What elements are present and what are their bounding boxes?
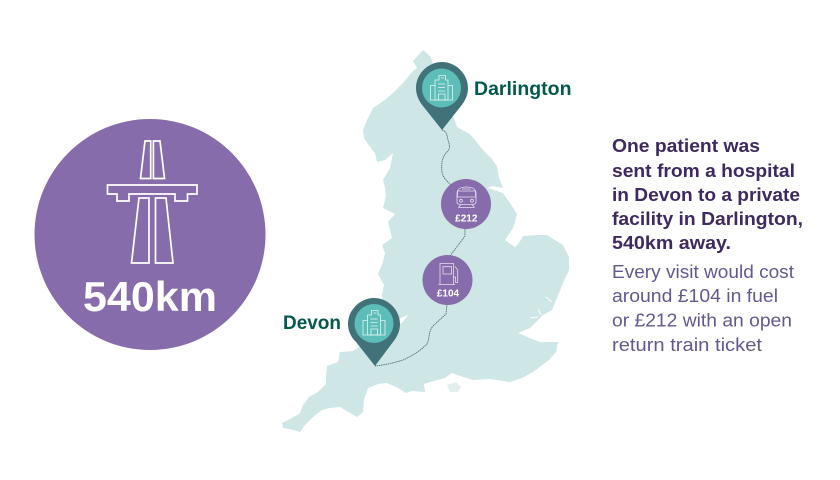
distance figure: 540km bbox=[83, 273, 217, 320]
text block: headline: facility in Darlington, bbox=[612, 209, 803, 229]
icon: train bbox=[457, 187, 476, 208]
text block: costs: around £104 in fuel bbox=[612, 286, 778, 306]
fuel price: £104 bbox=[437, 288, 460, 300]
icon: hospital bbox=[363, 310, 385, 335]
label: Darlington: Darlington bbox=[474, 79, 572, 100]
text block: costs bbox=[612, 262, 794, 355]
text block: headline: 540km away. bbox=[612, 233, 731, 253]
label: Devon: Devon bbox=[283, 313, 341, 334]
pin: Devon bbox=[348, 298, 400, 366]
big purple circle: distance bbox=[34, 119, 266, 350]
text block: headline: sent from a hospital bbox=[612, 161, 795, 181]
icon: motorway bbox=[108, 141, 197, 263]
icon: hospital bbox=[430, 76, 452, 100]
text block: headline: One patient was bbox=[612, 136, 760, 156]
text block: costs: Every visit would cost bbox=[612, 262, 794, 282]
train cost badge bbox=[441, 179, 491, 229]
text block: headline bbox=[612, 136, 803, 253]
text block: costs: return train ticket bbox=[612, 335, 762, 355]
pin: Darlington bbox=[416, 62, 468, 130]
train price: £212 bbox=[455, 214, 478, 224]
map of England and Wales bbox=[282, 50, 569, 432]
icon: fuel pump bbox=[438, 264, 458, 284]
route line Darlington to Devon bbox=[375, 130, 465, 366]
text block: headline: in Devon to a private bbox=[612, 185, 800, 205]
text block: costs: or £212 with an open bbox=[612, 310, 792, 330]
fuel cost badge bbox=[422, 255, 472, 305]
